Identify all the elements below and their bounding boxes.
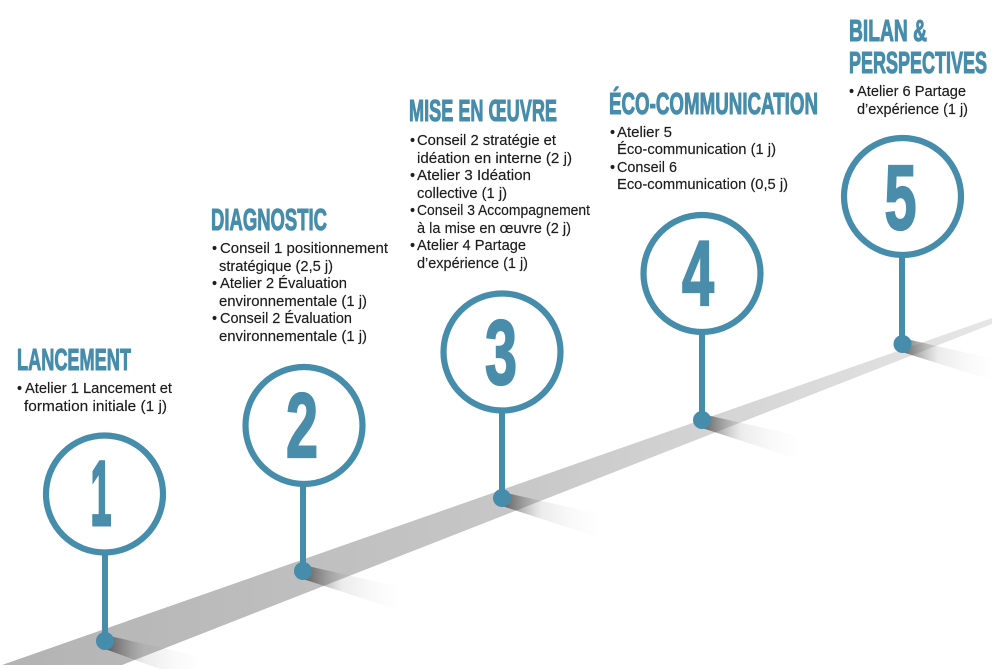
step 3: text: idéation en interne (2 j) <box>417 151 572 167</box>
step 3: text: d’expérience (1 j) <box>417 256 528 272</box>
step 2: text: Atelier 2 Évaluation <box>220 275 347 292</box>
step 4: pin <box>644 215 800 460</box>
road <box>2 318 992 665</box>
step 3: text: • <box>410 238 415 254</box>
step 4: text: Eco-communication (0,5 j) <box>617 177 788 193</box>
step 4: text: Atelier 5 <box>617 125 672 141</box>
step 3: text: Conseil 3 Accompagnement <box>417 203 590 219</box>
step 3: text: collective (1 j) <box>417 186 507 202</box>
step 1: text: formation initiale (1 j) <box>24 399 167 415</box>
step 2: text: DIAGNOSTIC <box>211 202 327 237</box>
step 2: text: Conseil 2 Évaluation <box>220 310 352 327</box>
step 3: text: • <box>410 168 415 184</box>
step 2: pin <box>246 367 401 611</box>
step 3: text <box>409 93 590 272</box>
step 5: text <box>849 13 987 118</box>
step 3: text: Conseil 2 stratégie et <box>417 133 556 149</box>
step 1: pin <box>46 436 203 669</box>
step 5: text: Atelier 6 Partage <box>857 84 966 100</box>
step 4: pin: 4 <box>682 223 714 325</box>
step 2: text: Conseil 1 positionnement <box>220 241 388 257</box>
step 4: text: • <box>610 125 615 141</box>
step 1: text: Atelier 1 Lancement et <box>25 381 172 397</box>
step 5: pin: 5 <box>884 147 916 249</box>
step 3: text: à la mise en œuvre (2 j) <box>417 221 571 237</box>
step 2: text: • <box>212 311 217 327</box>
step 3: text: • <box>410 133 415 149</box>
step 1: text <box>17 342 172 415</box>
step 1: text: LANCEMENT <box>17 342 131 377</box>
step 3: pin: 3 <box>485 302 517 404</box>
step 2: text: environnementale (1 j) <box>219 294 367 310</box>
step 4: text: ÉCO-COMMUNICATION <box>609 86 818 121</box>
step 2: text: stratégique (2,5 j) <box>219 259 333 275</box>
step 2: pin: 2 <box>286 375 318 477</box>
step 3: pin <box>444 294 600 538</box>
step 3: text: MISE EN ŒUVRE <box>409 93 557 128</box>
step 2: text: • <box>212 276 217 292</box>
step 5: pin <box>844 138 994 381</box>
step 4: text: Conseil 6 <box>617 160 677 176</box>
step 4: text: • <box>610 160 615 176</box>
step 5: text: d’expérience (1 j) <box>857 102 968 118</box>
step 3: text: Atelier 3 Idéation <box>417 168 531 184</box>
step 3: text: • <box>410 203 415 219</box>
step 3: text: Atelier 4 Partage <box>417 238 526 254</box>
step 2: text: • <box>212 241 217 257</box>
step 4: text: Éco-communication (1 j) <box>617 141 776 158</box>
step 5: text: BILAN & <box>849 13 927 48</box>
step 4: text <box>609 86 818 193</box>
step 1: pin: 1 <box>90 443 112 545</box>
step 2: text: environnementale (1 j) <box>219 329 367 345</box>
step 5: text: • <box>849 84 854 100</box>
step 1: text: • <box>17 381 22 397</box>
step 2: text <box>211 202 388 345</box>
